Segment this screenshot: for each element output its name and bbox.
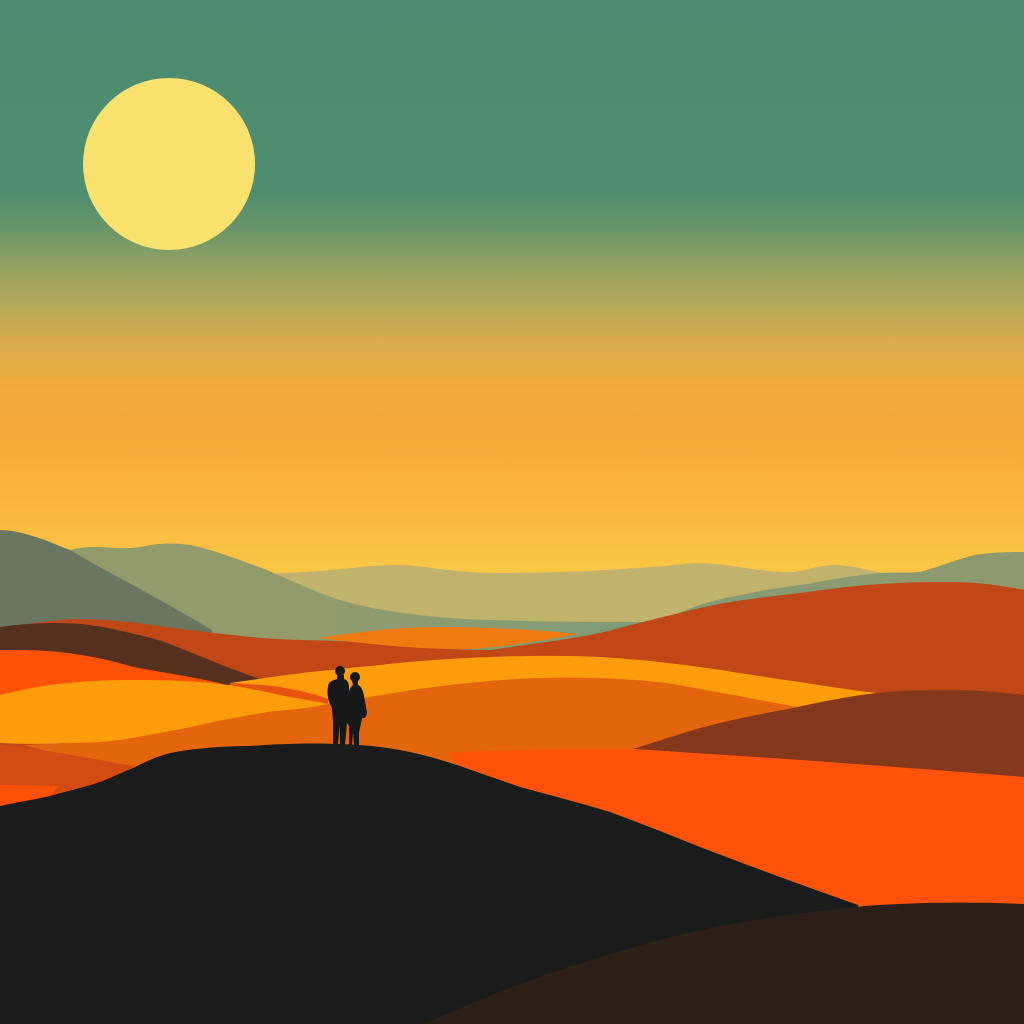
bright orange foreground field	[448, 749, 1024, 906]
right brown hill	[633, 690, 1024, 780]
left golden field	[0, 680, 330, 744]
figures: couple silhouette	[328, 666, 367, 745]
left red wedge	[0, 785, 58, 820]
dark brown foreground hill	[424, 903, 1024, 1024]
left grey-green hill	[0, 530, 212, 660]
black foreground hill	[0, 744, 900, 1024]
red stripe	[230, 683, 328, 704]
woman	[347, 672, 367, 745]
orange distant field	[318, 627, 578, 649]
golden band	[230, 656, 877, 760]
man	[328, 666, 349, 745]
red-orange left field	[0, 650, 227, 700]
left rust wedge	[0, 744, 133, 800]
far tan hills	[277, 563, 882, 660]
right green hill	[640, 552, 1024, 640]
central orange field	[23, 678, 797, 790]
sun	[83, 78, 255, 250]
middle green hill	[60, 543, 660, 660]
dark brown hill	[0, 623, 260, 685]
rust hills	[0, 582, 1024, 760]
